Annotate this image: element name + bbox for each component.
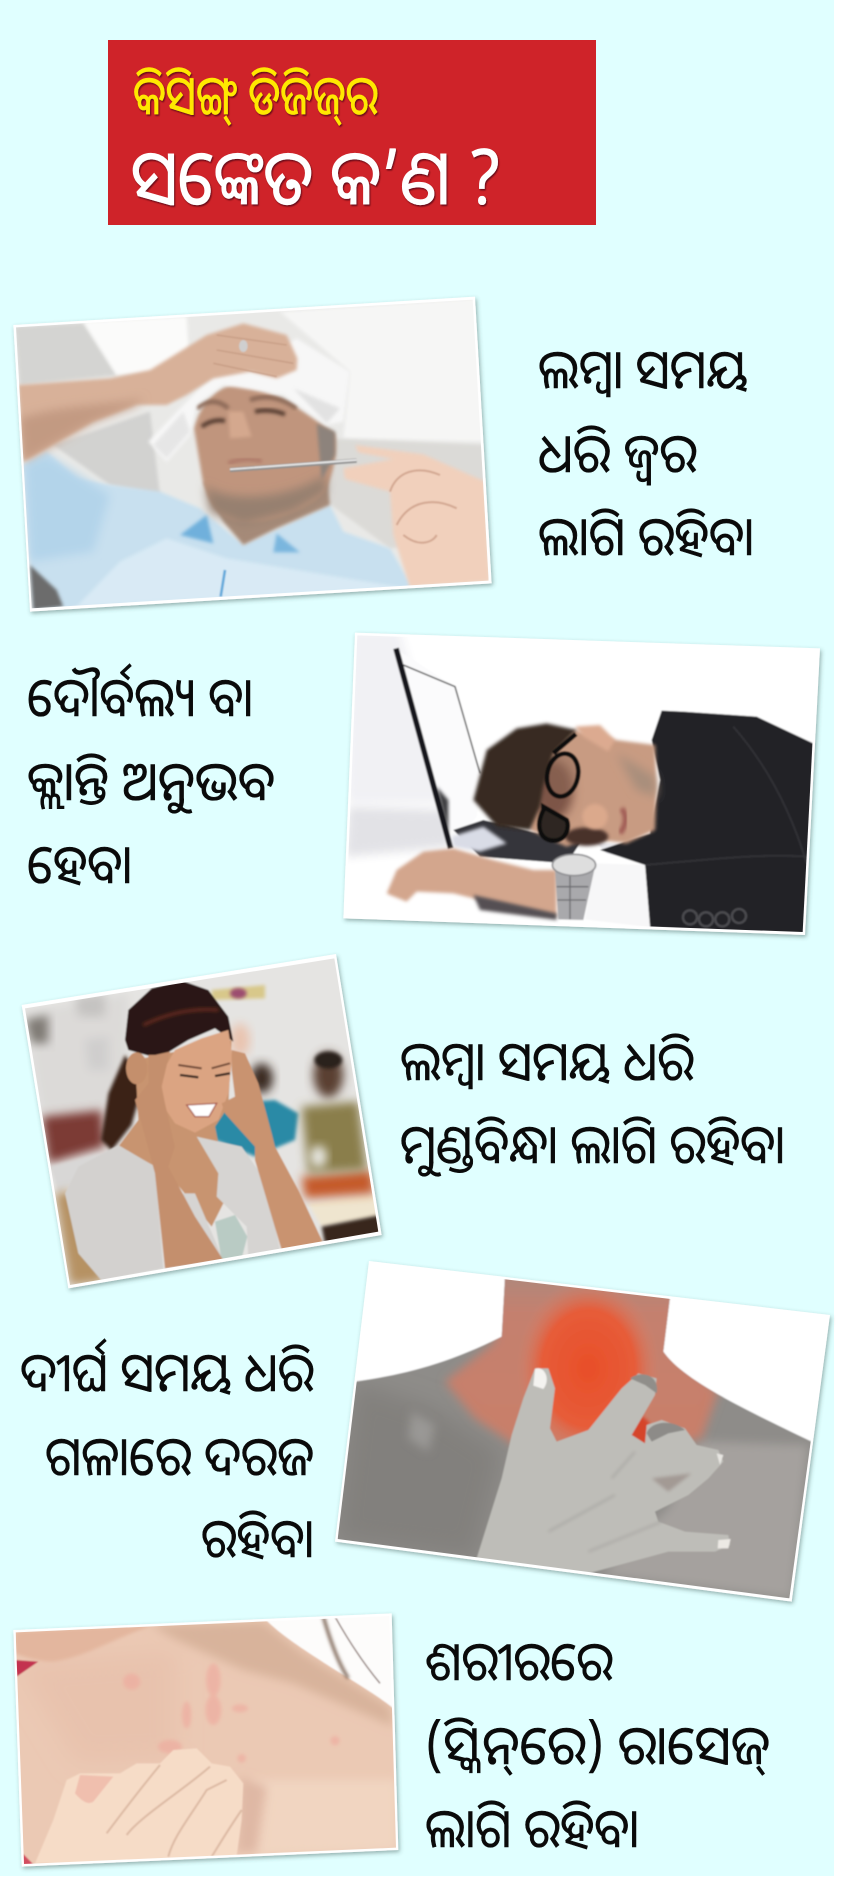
sleeve buttons	[683, 909, 746, 926]
photo: sore throat	[335, 1261, 830, 1602]
text: weakness	[27, 658, 275, 899]
photo: skin rash	[10, 1613, 405, 1873]
chin	[15, 1625, 153, 1662]
text: headache: ମୁଣ୍ଡବିନ୍ଧା ଲାଗି ରହିବା	[400, 1105, 785, 1179]
laptop screen	[403, 658, 453, 836]
photo: man with fever and thermometer	[10, 295, 500, 620]
neck	[203, 475, 330, 545]
text: skin rash: (ସ୍କିନ୍‌ରେ) ରାସେଜ୍	[425, 1706, 770, 1780]
title line 1: କିସିଙ୍ଗ୍ ଡିଜିଜ୍‌ର	[133, 56, 378, 130]
text: throat pain: ଦୀର୍ଘ ସମୟ ଧରି	[20, 1333, 314, 1407]
face	[527, 730, 657, 847]
text: headache: ଲମ୍ବା ସମୟ ଧରି	[400, 1022, 694, 1096]
text: skin rash	[425, 1622, 770, 1863]
chest light and shadow	[240, 1780, 397, 1857]
collar	[15, 1660, 38, 1677]
shirt	[23, 452, 413, 610]
photo: man asleep on laptop	[340, 630, 830, 950]
text: weakness: କ୍ଲାନ୍ତି ଅନୁଭବ	[27, 742, 275, 816]
text: headache	[400, 1022, 785, 1179]
white cuff	[591, 867, 652, 926]
jacket	[600, 711, 813, 935]
text: weakness: ଦୌର୍ବଲ୍ୟ ବା	[27, 658, 253, 732]
hand	[477, 1368, 730, 1573]
hair	[125, 981, 233, 1058]
right arm and hand	[222, 1050, 323, 1250]
watch	[555, 867, 595, 920]
text: skin rash: ଲାଗି ରହିବା	[425, 1789, 639, 1863]
face	[162, 1030, 232, 1133]
title banner	[108, 40, 596, 227]
hair	[473, 723, 577, 830]
background person 2	[313, 1052, 343, 1098]
glasses	[539, 734, 582, 841]
text: weakness: ହେବା	[27, 825, 132, 899]
text: fever	[538, 330, 754, 571]
neck redness	[445, 1265, 718, 1452]
white corner	[262, 1613, 393, 1708]
text: throat pain: ଗଳାରେ ଦରଜ	[45, 1417, 314, 1491]
neck shadow	[150, 1622, 393, 1727]
text: throat pain	[20, 1333, 314, 1573]
towel	[148, 338, 350, 462]
face	[194, 385, 336, 522]
hair strands	[323, 1617, 348, 1678]
keyboard	[453, 820, 580, 863]
eyes	[202, 410, 285, 427]
raised arm and hand	[18, 323, 297, 462]
background person 1	[250, 1063, 273, 1093]
hand and arm	[387, 848, 557, 917]
cardigan	[65, 1145, 163, 1281]
ponytail	[101, 1055, 143, 1151]
thermometer	[230, 461, 357, 470]
holding hand	[343, 445, 490, 588]
left arm and hand	[135, 1052, 223, 1268]
text: throat pain: ରହିବା	[201, 1499, 314, 1573]
text: fever: ଲମ୍ବା ସମୟ	[538, 330, 748, 404]
text: skin rash: ଶରୀରରେ	[425, 1622, 613, 1696]
photo: woman with headache	[15, 950, 390, 1300]
rash spots	[123, 1663, 340, 1763]
text: fever: ଲାଗି ରହିବା	[538, 497, 754, 571]
title line 2: ସଙ୍କେତ କ’ଣ ?	[131, 124, 502, 227]
text: fever: ଧରି ଜ୍ୱର	[538, 414, 697, 488]
hand	[35, 1748, 243, 1863]
skin base behind face	[118, 1040, 232, 1227]
background desk	[310, 1195, 376, 1226]
torso	[338, 1306, 811, 1598]
